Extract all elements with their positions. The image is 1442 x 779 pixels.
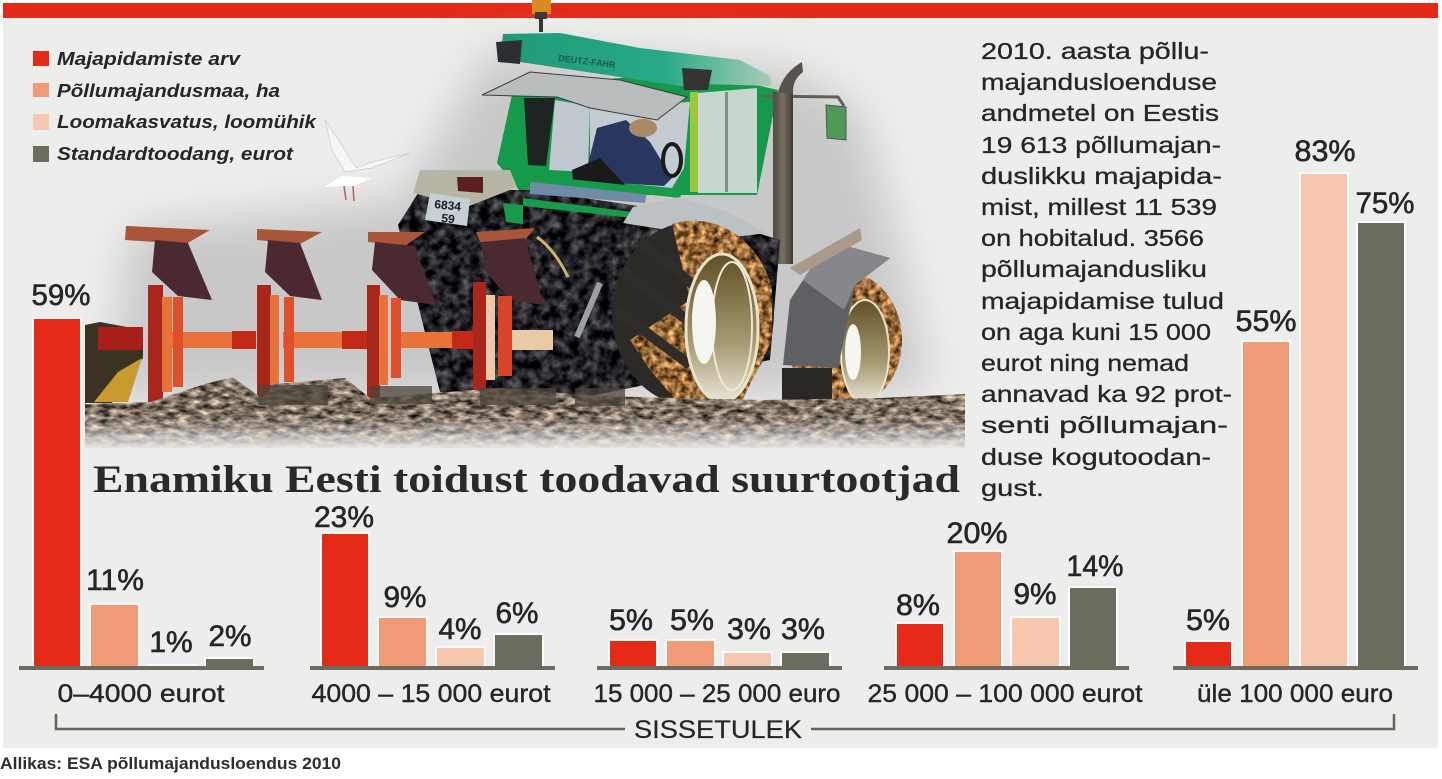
- legend: [33, 48, 318, 164]
- driver: [572, 119, 681, 186]
- engine body: [398, 170, 780, 400]
- body text: on hobitalud. 3566: [981, 225, 1204, 251]
- body text: eurot ning nemad: [981, 350, 1189, 376]
- body text: duslikku majapida-: [981, 163, 1222, 189]
- income bracket: [56, 714, 1394, 744]
- bar chart: 25 000–100 000 eurot: 14%: [1066, 550, 1124, 583]
- bar chart: 15 000–25 000 euro: [594, 604, 842, 708]
- body text: 19 613 põllumajan-: [981, 132, 1221, 158]
- bar chart: üle 100 000 euro: [1173, 135, 1418, 708]
- top red bar: [3, 3, 1438, 18]
- body text: annavad ka 92 prot-: [981, 381, 1232, 407]
- body text: mist, millest 11 539: [981, 194, 1217, 220]
- bar chart: üle 100 000 euro: üle 100 000 euro: [1197, 680, 1393, 708]
- warning beacon: [532, 0, 551, 32]
- plough unit 4: [473, 228, 544, 400]
- soil: [85, 370, 965, 448]
- bar chart: üle 100 000 euro: 5%: [1186, 604, 1230, 637]
- front wheel: [782, 228, 902, 408]
- plough unit 2: [257, 229, 322, 403]
- income bracket: SISSETULEK: [634, 716, 802, 744]
- photo: tractor with plough: [85, 0, 965, 448]
- bar chart: 0–4000 eurot: 2%: [208, 620, 252, 653]
- bar chart: 4000–15 000 eurot: 6%: [496, 597, 538, 630]
- bar chart: 4000–15 000 eurot: [310, 501, 555, 708]
- bar chart: 25 000–100 000 eurot: 9%: [1014, 578, 1056, 611]
- roof: DEUTZ-FAHR: [558, 53, 617, 70]
- bar chart: 15 000–25 000 euro: 3%: [727, 613, 771, 646]
- bar chart: 15 000–25 000 euro: 15 000 – 25 000 euro: [594, 680, 840, 708]
- bar chart: 25 000–100 000 eurot: 20%: [946, 517, 1008, 550]
- bar chart: 15 000–25 000 euro: 3%: [781, 613, 825, 646]
- legend item: Põllumajandusmaa, ha: Põllumajandusmaa, ha: [57, 80, 280, 101]
- licence plate: [425, 193, 470, 226]
- body text: andmetel on Eestis: [981, 100, 1219, 126]
- bar chart: 0–4000 eurot: 0–4000 eurot: [58, 680, 225, 708]
- seagull: [324, 120, 410, 201]
- bar chart: 25 000–100 000 eurot: 8%: [896, 589, 940, 622]
- body text: majapidamise tulud: [981, 288, 1224, 314]
- furrow shadows: [258, 385, 625, 406]
- plough unit 1: [125, 226, 212, 405]
- cab: [497, 70, 778, 195]
- legend item: Standardtoodang, eurot: Standardtoodang, eurot: [57, 143, 294, 164]
- plough unit 3: [367, 232, 436, 403]
- bar chart: üle 100 000 euro: 83%: [1294, 135, 1356, 168]
- body text: majandusloenduse: [981, 69, 1217, 95]
- body text: [981, 38, 1232, 501]
- bar chart: 4000–15 000 eurot: 9%: [384, 581, 426, 614]
- bar chart: 4000–15 000 eurot: 4000 – 15 000 eurot: [312, 680, 551, 708]
- licence plate: 6834: [434, 197, 462, 214]
- roof: [496, 33, 772, 90]
- legend item: Loomakasvatus, loomühik: Loomakasvatus, loomühik: [57, 111, 318, 132]
- licence plate: 59: [441, 211, 456, 226]
- bar chart: 15 000–25 000 euro: 5%: [609, 604, 653, 637]
- bar chart: 25 000–100 000 eurot: [868, 517, 1143, 708]
- bar chart: 4000–15 000 eurot: 4%: [438, 613, 482, 646]
- body text: põllumajandusliku: [981, 256, 1207, 282]
- body text: gust.: [981, 475, 1044, 501]
- sun visor: [482, 72, 687, 120]
- body text: 2010. aasta põllu-: [981, 38, 1209, 64]
- body text: duse kogutoodan-: [981, 444, 1211, 470]
- body text: senti põllumajan-: [981, 412, 1228, 438]
- legend item: Majapidamiste arv: Majapidamiste arv: [57, 48, 242, 69]
- bar chart: üle 100 000 euro: 75%: [1356, 187, 1414, 220]
- title: Enamiku Eesti toidust toodavad suurtootjad: [93, 458, 960, 501]
- source: Allikas: ESA põllumajandusloendus 2010: [0, 754, 341, 773]
- plough: [85, 226, 553, 405]
- bar chart: 0–4000 eurot: 1%: [149, 626, 193, 659]
- bar chart: 4000–15 000 eurot: 23%: [314, 501, 374, 534]
- bar chart: 0–4000 eurot: [19, 279, 264, 708]
- bar chart: 0–4000 eurot: 59%: [32, 279, 90, 312]
- bar chart: 25 000–100 000 eurot: 25 000 – 100 000 eurot: [868, 680, 1143, 708]
- exhaust pipe and mirror: [762, 62, 846, 264]
- plough beam: [85, 322, 553, 403]
- bar chart: 15 000–25 000 euro: 5%: [670, 604, 714, 637]
- bar chart: üle 100 000 euro: 55%: [1236, 305, 1296, 338]
- rear wheel: [612, 221, 774, 406]
- body text: on aga kuni 15 000: [981, 319, 1211, 345]
- bar chart: 0–4000 eurot: 11%: [86, 564, 144, 597]
- photo shadow halo: [110, 50, 930, 400]
